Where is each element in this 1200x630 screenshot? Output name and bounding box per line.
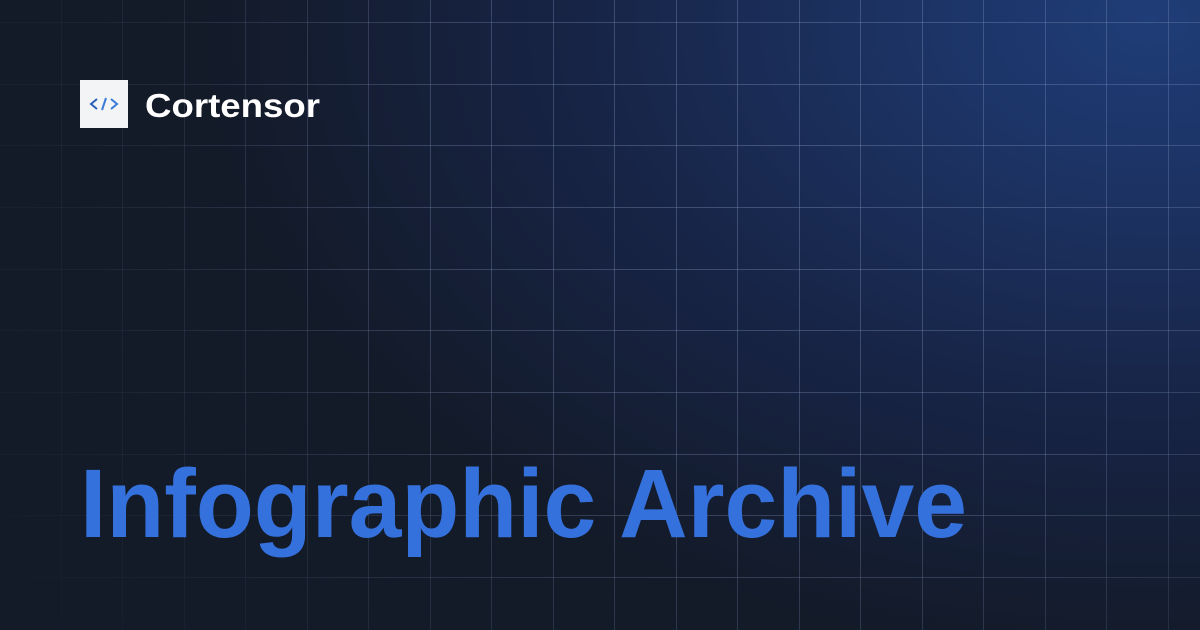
title: Infographic Archive [80, 449, 967, 558]
icon: code brackets [80, 80, 128, 128]
logo [80, 80, 320, 128]
brand name: Cortensor [145, 87, 320, 124]
